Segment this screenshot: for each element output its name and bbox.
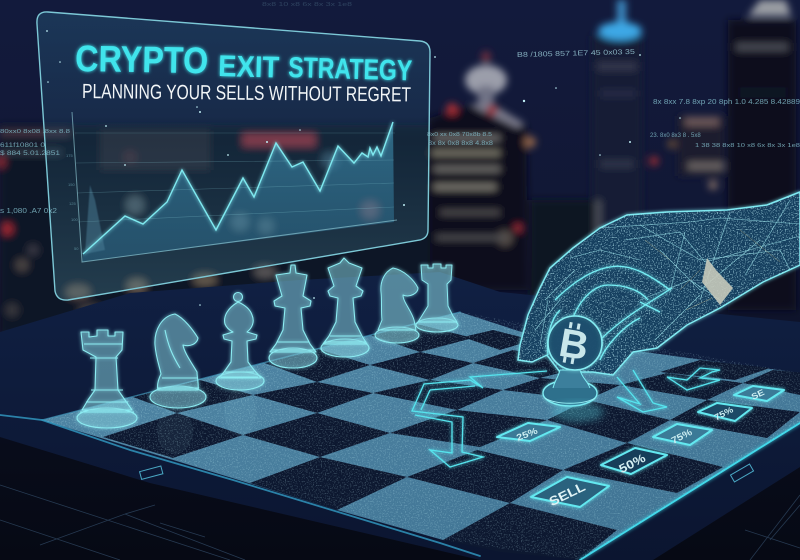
chart: 175 [66,153,73,158]
tag: SELL: SELL [547,479,588,509]
floating data streams [0,2,800,215]
finger contours [548,266,672,360]
floating data streams: 1 38 38 8x8 10 x8 6x 8x 3x 1e8 [695,143,800,149]
floating data streams: 8x 8xx 7.8 8xp 20 8ph 1.0 4.285 8.42889 [653,99,800,106]
chart: 150 [68,182,75,187]
title: CRYPTO [75,38,209,81]
floating data streams: $ 884 5.01.2851 [0,150,60,157]
icon: ethereum [702,258,733,305]
hand wireframe [515,190,800,380]
arrow side [667,368,720,390]
floating data streams: 8x 8x 0x8 8x8 4.8x8 [428,141,494,147]
chart: 100 [71,217,78,222]
tag: 25%: 25% [515,426,539,443]
hand silhouette [518,192,800,375]
rook right [416,264,458,332]
chart [66,112,397,262]
tag: 50%: 50% [617,451,648,476]
bitcoin symbol: B [556,321,592,369]
floating data streams: s 1,080 .A7 0x2 [0,206,57,215]
floating data streams: B8 /1805 857 1E7 45 0x03 35 [517,49,635,59]
title: EXIT [218,50,280,85]
panel glass [37,12,430,300]
chess pieces [77,258,458,454]
title [75,38,413,87]
tag: SELL [531,477,609,509]
light squares base [42,312,800,560]
floating data streams: 80xx0 8x08 .8xx 8.8 [0,129,70,135]
floating data streams: 8x8 10 x8 6x 8x 3x 1e8 [262,2,352,8]
sell target tags [497,386,784,509]
chart: 125 [69,201,76,206]
floating data streams: 8x0 xx 0x8 70x8b 8.5 [427,132,492,138]
tag: SE: SE [750,388,766,401]
arrow down [617,370,667,412]
tag: 75% upper: 75% [713,405,735,422]
tag: SE [734,386,784,401]
bitcoin token [543,316,604,422]
lower ground grid [0,485,800,560]
chart: 50 [74,246,79,251]
king [269,265,317,368]
floating data streams: 611f10801 0 [0,142,45,149]
tag: 75% [653,424,712,446]
chessboard [0,272,800,560]
knight right [375,268,419,343]
bishop [216,292,264,390]
hand holding bitcoin [515,190,800,422]
tag: 25% [497,423,560,443]
piece reflections [157,388,256,454]
knight left [150,314,206,408]
hologram panel [37,12,430,300]
tag: 75% upper [698,403,752,422]
board frame [0,272,800,560]
subtitle: PLANNING YOUR SELLS WITHOUT REGRET [82,80,412,106]
queen [321,258,369,357]
floating data streams: 23. 8x0 8x3 8 . 5x8 [650,133,701,139]
title: STRATEGY [288,52,413,87]
dark squares [103,324,800,560]
board glowing edges [0,312,800,560]
rook left [77,330,137,428]
arrows on the board [412,368,720,467]
tag: 50% [601,448,667,476]
floating particles [46,30,681,306]
tag: 75%: 75% [670,427,694,446]
stepped arrow left [412,371,547,467]
board speckle [44,312,800,560]
